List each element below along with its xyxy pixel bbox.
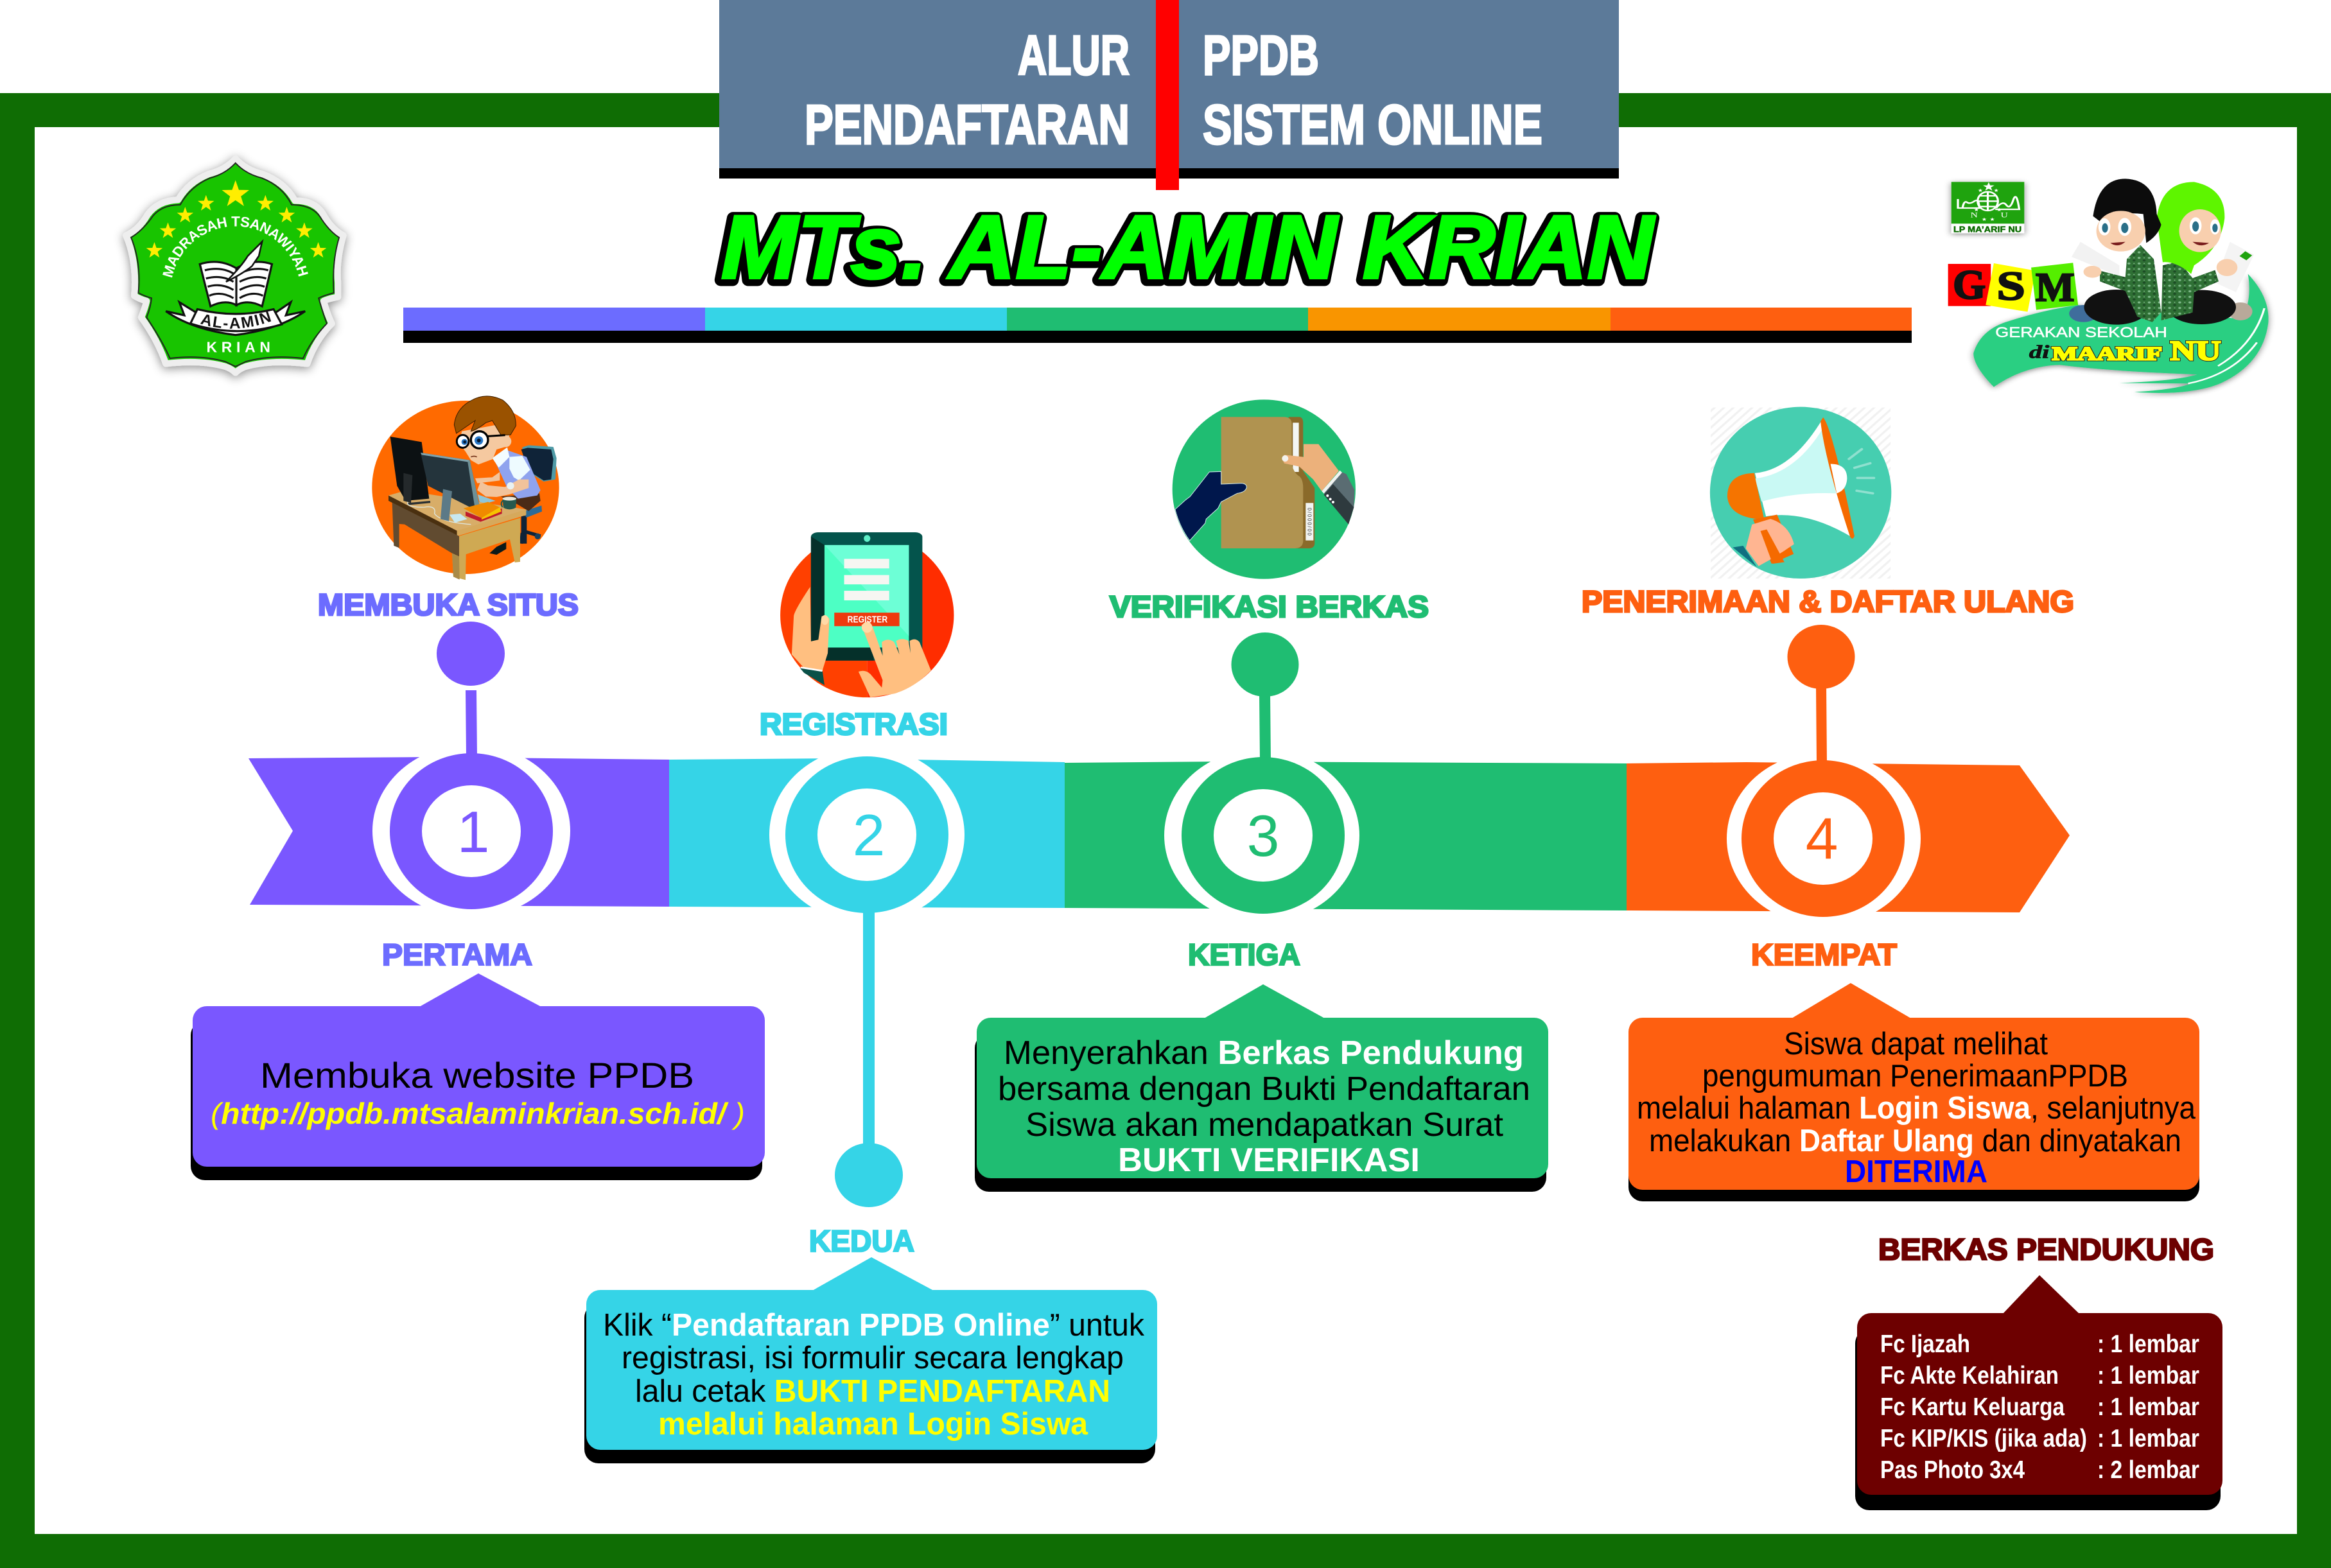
logo caption: NU xyxy=(2170,336,2221,367)
icon: folder handover xyxy=(1173,399,1356,579)
callout: berkas pendukung list: Fc KIP/KIS (jika ada) xyxy=(1880,1425,2087,1452)
logo: LP Ma'arif NU: U xyxy=(2001,211,2008,219)
register button xyxy=(834,613,900,626)
icon: megaphone xyxy=(1710,407,1891,579)
heading: berkas pendukung: BERKAS PENDUKUNG xyxy=(1878,1232,2214,1266)
callout: step 3: Menyerahkan Berkas Pendukung xyxy=(1004,1034,1524,1072)
header banner: SISTEM ONLINE xyxy=(1203,94,1542,156)
callout: berkas pendukung list xyxy=(1855,1275,2222,1510)
timeline ribbon xyxy=(249,757,2070,912)
heading: ketiga: KETIGA xyxy=(1188,937,1300,971)
callout: berkas pendukung list: : 1 lembar xyxy=(2097,1393,2199,1421)
callout: berkas pendukung list: Pas Photo 3x4 xyxy=(1880,1456,2025,1484)
step 4 marker: 4 xyxy=(1806,806,1838,871)
callout: step 2: lalu cetak BUKTI PENDAFTARAN xyxy=(635,1374,1110,1409)
two children xyxy=(2069,179,2254,325)
header banner: ALUR xyxy=(1018,24,1130,87)
colour bar xyxy=(403,308,1912,343)
logo caption: di xyxy=(2029,342,2050,362)
callout: step 1: Membuka website PPDB xyxy=(260,1055,694,1095)
callout: step 2 xyxy=(584,1257,1157,1463)
title: MTs. AL-AMIN KRIAN xyxy=(719,198,1654,299)
logo: madrasah al-amin: AL-AMIN xyxy=(200,311,271,329)
step 3 marker: 3 xyxy=(1247,804,1279,869)
logo caption: NU xyxy=(2170,336,2221,367)
logo: GSM Gerakan Sekolah di Maarif NU xyxy=(1948,179,2269,393)
callout: berkas pendukung list: : 1 lembar xyxy=(2097,1362,2199,1389)
header banner: PENDAFTARAN xyxy=(805,94,1130,156)
header banner xyxy=(719,0,1619,190)
logo: madrasah al-amin: KRIAN xyxy=(206,339,270,356)
step 2 marker: 2 xyxy=(853,803,885,868)
callout: step 2: melalui halaman Login Siswa xyxy=(658,1407,1088,1442)
step 1 marker xyxy=(372,622,570,918)
GSM blocks: G xyxy=(1953,262,1986,308)
icon: folder handover: 0/000/00 xyxy=(1307,508,1313,536)
logo: LP Ma'arif NU xyxy=(1951,182,2024,234)
step 1 marker: 1 xyxy=(457,800,489,865)
step 2 marker xyxy=(769,747,965,1207)
callout: berkas pendukung list: : 2 lembar xyxy=(2097,1456,2199,1484)
GSM blocks: M xyxy=(2036,265,2075,309)
logo caption: MAARIF xyxy=(2052,343,2162,364)
heading: verifikasi berkas: VERIFIKASI BERKAS xyxy=(1110,589,1429,623)
logo: LP Ma'arif NU: LP MA’ARIF NU xyxy=(1953,225,2021,234)
icon: tablet register xyxy=(780,532,954,697)
callout: step 3: BUKTI VERIFIKASI xyxy=(1118,1142,1420,1179)
GSM blocks xyxy=(1948,262,2078,312)
step 4 marker xyxy=(1727,625,1921,925)
callout: step 4: Siswa dapat melihat xyxy=(1784,1027,2048,1061)
heading: penerimaan dan daftar ulang: PENERIMAAN & DAFTAR ULANG xyxy=(1582,584,2074,618)
callout: step 3: bersama dengan Bukti Pendaftaran xyxy=(998,1070,1530,1108)
callout: step 3: Siswa akan mendapatkan Surat xyxy=(1026,1106,1504,1144)
callout: step 2: Klik “Pendaftaran PPDB Online” untuk xyxy=(603,1308,1144,1343)
heading: registrasi: REGISTRASI xyxy=(760,707,948,741)
logo: LP Ma'arif NU: N xyxy=(1971,211,1978,219)
callout: step 1 xyxy=(191,973,765,1180)
callout: berkas pendukung list: Fc Akte Kelahiran xyxy=(1880,1362,2059,1389)
callout: step 4: DITERIMA xyxy=(1845,1154,1987,1189)
title: MTs. AL-AMIN KRIAN xyxy=(721,196,1655,297)
callout: step 3 xyxy=(975,984,1548,1192)
logo: madrasah al-amin xyxy=(118,153,352,383)
logo caption: MAARIF xyxy=(2052,343,2162,364)
logo caption: GERAKAN SEKOLAH xyxy=(1995,324,2167,340)
heading: pertama: PERTAMA xyxy=(382,937,532,971)
heading: membuka situs: MEMBUKA SITUS xyxy=(318,588,579,622)
callout: berkas pendukung list: Fc Ijazah xyxy=(1880,1330,1970,1358)
callout: step 4 xyxy=(1628,983,2199,1201)
heading: keempat: KEEMPAT xyxy=(1751,937,1897,971)
step 3 marker xyxy=(1164,632,1359,922)
logo: madrasah al-amin: MADRASAH TSANAWIYAH xyxy=(162,216,308,277)
callout: step 1: (http://ppdb.mtsalaminkrian.sch.id/ ) xyxy=(211,1097,745,1130)
callout: step 2: registrasi, isi formulir secara lengkap xyxy=(622,1341,1124,1375)
header banner: PPDB xyxy=(1203,24,1319,87)
callout: step 4: pengumuman PenerimaanPPDB xyxy=(1702,1059,2128,1093)
callout: berkas pendukung list: : 1 lembar xyxy=(2097,1330,2199,1358)
icon: person at computer xyxy=(372,396,559,580)
register button: REGISTER xyxy=(848,614,888,625)
callout: step 4: melakukan Daftar Ulang dan dinyatakan xyxy=(1649,1124,2181,1158)
callout: berkas pendukung list: Fc Kartu Keluarga xyxy=(1880,1393,2065,1421)
logo caption xyxy=(1995,324,2221,367)
green swoosh xyxy=(1973,274,2269,393)
callout: berkas pendukung list: : 1 lembar xyxy=(2097,1425,2199,1452)
heading: kedua: KEDUA xyxy=(809,1224,914,1258)
GSM blocks: S xyxy=(1997,263,2025,309)
callout: step 4: melalui halaman Login Siswa, selanjutnya xyxy=(1637,1091,2196,1126)
